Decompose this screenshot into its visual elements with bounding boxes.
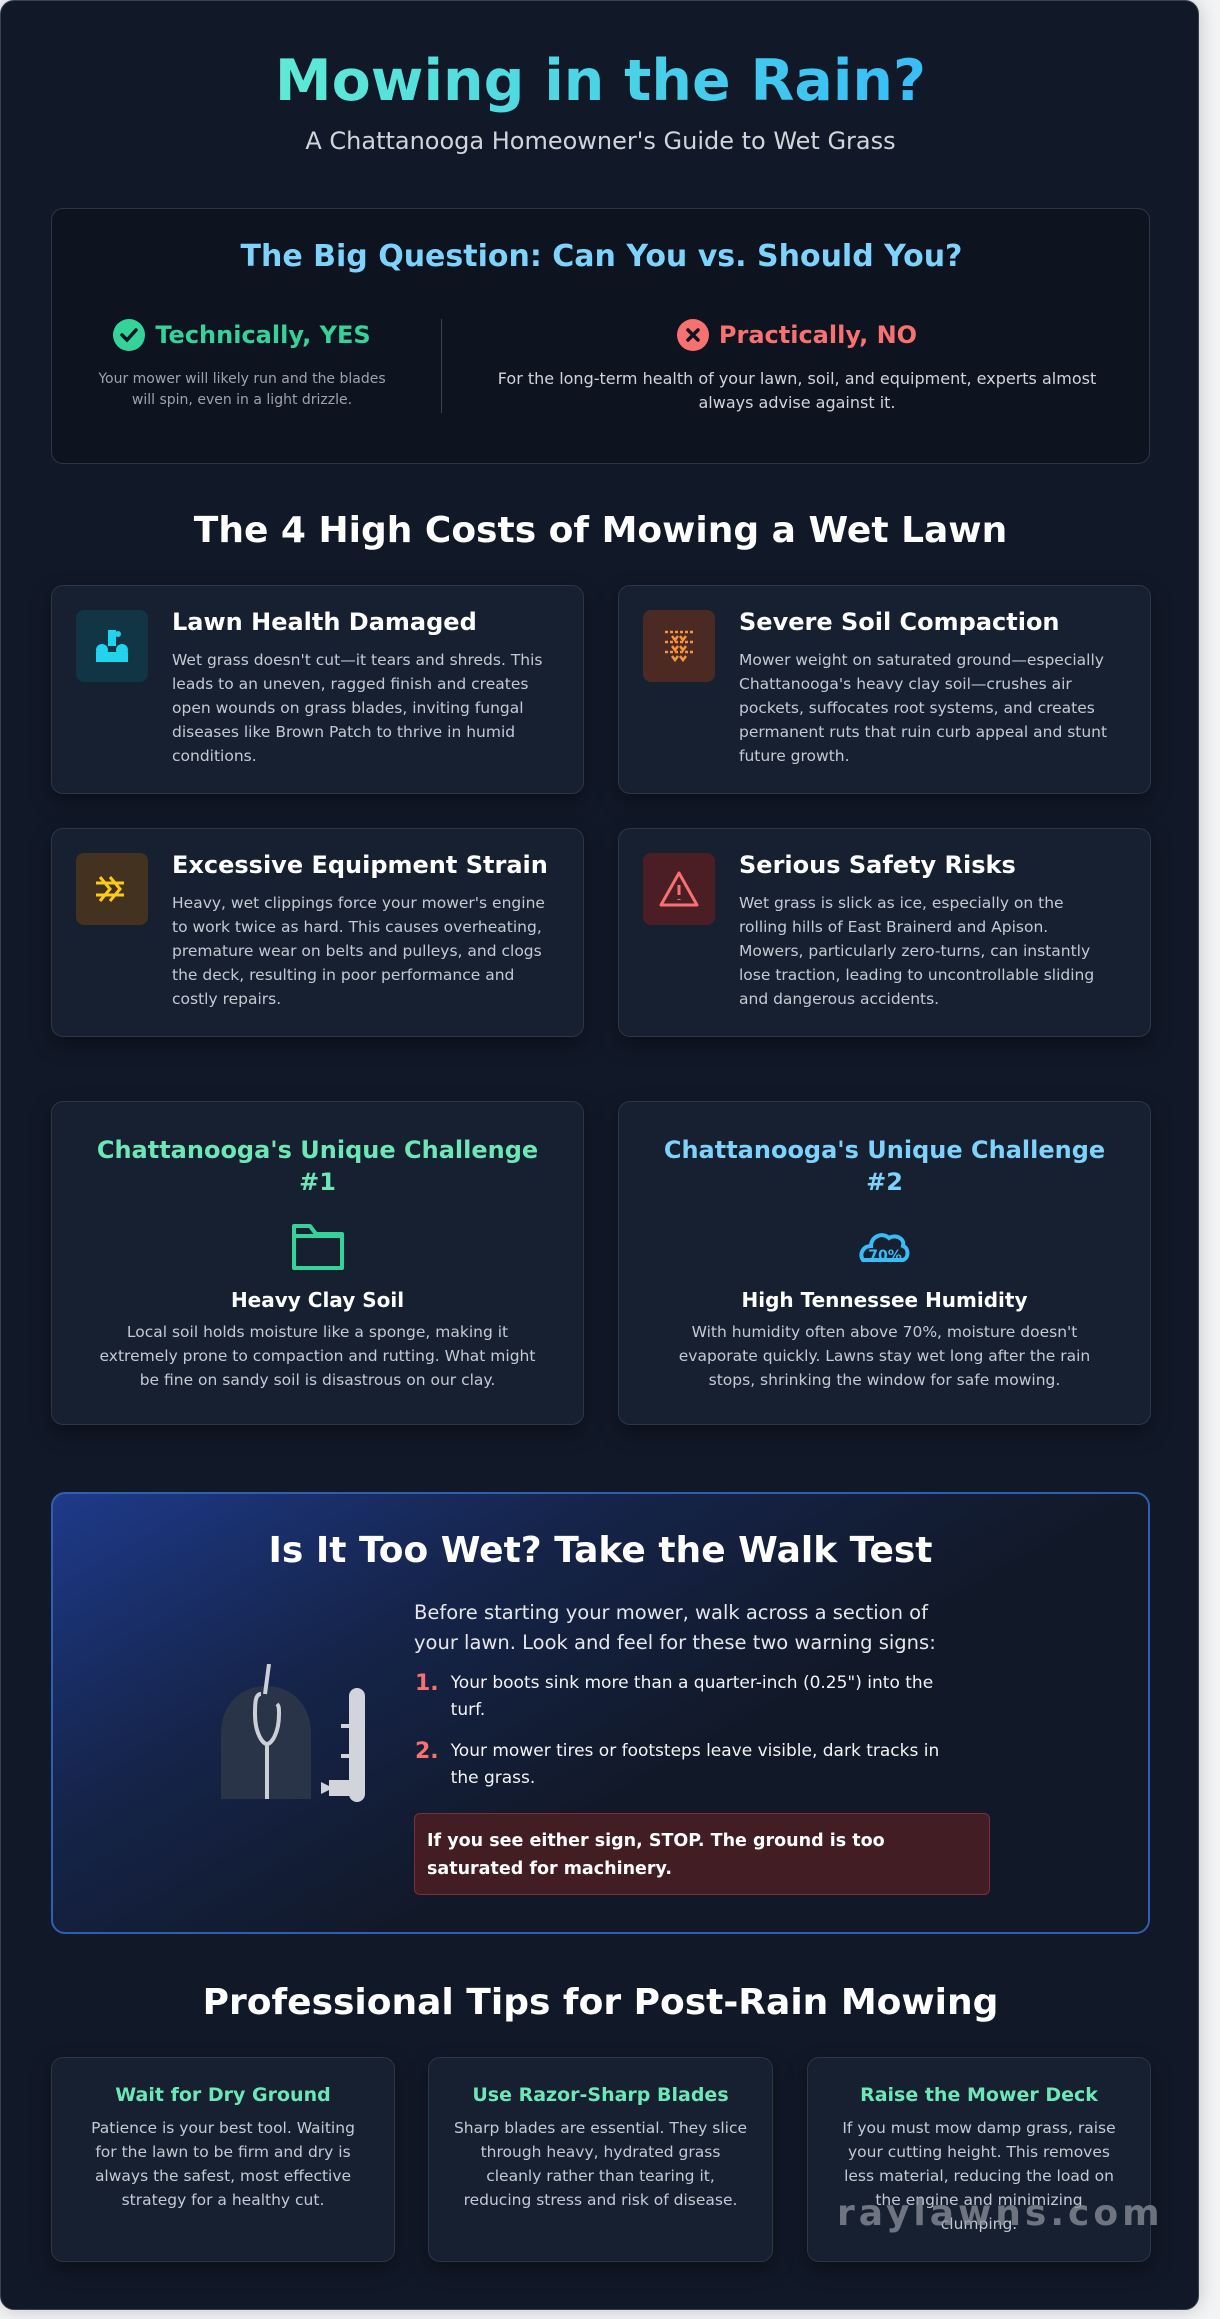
- panel: big question: [51, 208, 1150, 464]
- card: challenge 2: High Tennessee Humidity: [741, 1288, 1028, 1312]
- icon: soil: [643, 610, 715, 682]
- icon: chevrons: [76, 853, 148, 925]
- tip: dry ground: Patience is your best tool. Waiting for the lawn to be firm and dry is always the safest, most effective strategy for a healthy cut.: [91, 2119, 355, 2209]
- list: warning signs: Your boots sink more than a quarter-inch (0.25") into the turf.: [451, 1673, 933, 1720]
- column: technically yes: Technically, YES: [155, 321, 371, 349]
- column: practically no: Practically, NO: [719, 321, 917, 349]
- card: equipment strain: [51, 828, 584, 1037]
- icon: grass: [76, 610, 148, 682]
- card: challenge 2: [618, 1101, 1151, 1425]
- title: Mowing in the Rain?: [275, 48, 926, 114]
- tip: sharp blades: [428, 2057, 773, 2262]
- card: lawn health: [51, 585, 584, 794]
- icon: cloud humidity: 70%: [868, 1248, 901, 1264]
- list: warning signs: 1.: [415, 1671, 439, 1696]
- column: practically no: [498, 319, 1096, 412]
- icon: warning: [643, 853, 715, 925]
- icon: cloud humidity: [859, 1233, 910, 1264]
- card: safety: Wet grass is slick as ice, especially on the rolling hills of East Brainerd and Apison. Mowers, particularly zero-turns, can instantly lose traction, leading to uncontrollable sliding and dangerous accidents.: [739, 894, 1094, 1008]
- tip: raise deck: If you must mow damp grass, raise your cutting height. This removes less material, reducing the load on the engine and minimizing clumping.: [842, 2119, 1116, 2233]
- card: lawn health: Wet grass doesn't cut—it tears and shreds. This leads to an uneven, ragged finish and creates open wounds on grass blades, inviting fungal diseases like Brown Patch to thrive in humid conditions.: [172, 651, 542, 765]
- card: challenge 1: [51, 1101, 584, 1425]
- card: safety: [618, 828, 1151, 1037]
- list: warning signs: Your mower tires or footsteps leave visible, dark tracks in the grass.: [451, 1741, 939, 1788]
- panel: walk test: [51, 1492, 1150, 1934]
- column: practically no: For the long-term health of your lawn, soil, and equipment, experts almost: [498, 369, 1096, 388]
- tip: sharp blades: Use Razor-Sharp Blades: [472, 2084, 729, 2106]
- icon: folder: [292, 1224, 344, 1270]
- list: warning signs: 2.: [415, 1739, 439, 1764]
- card: soil compaction: [618, 585, 1151, 794]
- card: equipment strain: Excessive Equipment Strain: [172, 851, 548, 879]
- card: soil compaction: Mower weight on saturated ground—especially Chattanooga's heavy clay soil—crushes air pockets, suffocates root systems, and creates permanent ruts that ruin curb appeal and stunt future growth.: [739, 651, 1107, 765]
- card: challenge 1: #1: [299, 1168, 336, 1196]
- card: lawn health: Lawn Health Damaged: [172, 608, 477, 636]
- card: challenge 2: With humidity often above 70%, moisture doesn't evaporate quickly. Lawns stay wet long after the rain stops, shrinking the window for safe mowing.: [679, 1323, 1090, 1389]
- callout: stop: [414, 1813, 990, 1895]
- heading: big question: The Big Question: Can You vs. Should You?: [241, 239, 962, 274]
- tip: dry ground: Wait for Dry Ground: [115, 2084, 331, 2106]
- card: equipment strain: Heavy, wet clippings force your mower's engine to work twice as hard. This causes overheating, premature wear on belts and pulleys, and clogs the deck, resulting in poor performance and costly repairs.: [172, 894, 545, 1008]
- card: challenge 1: Heavy Clay Soil: [231, 1288, 404, 1312]
- callout: stop: If you see either sign, STOP. The ground is too saturated for machinery.: [427, 1831, 885, 1879]
- card: challenge 1: Local soil holds moisture like a sponge, making it extremely prone to compaction and rutting. What might be fine on sandy soil is disastrous on our clay.: [100, 1323, 535, 1389]
- card: challenge 2: #2: [866, 1168, 903, 1196]
- card: challenge 1: Chattanooga's Unique Challenge: [97, 1136, 538, 1164]
- tip: sharp blades: Sharp blades are essential. They slice through heavy, hydrated grass cleanly rather than tearing it, reducing stress and risk of disease.: [454, 2119, 747, 2209]
- card: soil compaction: Severe Soil Compaction: [739, 608, 1060, 636]
- column: technically yes: [98, 319, 386, 408]
- list: warning signs: [415, 1671, 939, 1788]
- card: challenge 2: Chattanooga's Unique Challenge: [664, 1136, 1105, 1164]
- watermark: raylawns.com: [837, 2193, 1164, 2234]
- text: intro: Before starting your mower, walk across a section of your lawn. Look and feel for these two warning signs:: [414, 1601, 936, 1654]
- column: technically yes: will spin, even in a light drizzle.: [132, 392, 352, 408]
- heading: 4 high costs: The 4 High Costs of Mowing a Wet Lawn: [194, 510, 1007, 551]
- column: practically no: always advise against it.: [698, 393, 896, 412]
- tip: raise deck: Raise the Mower Deck: [860, 2084, 1098, 2106]
- tip: dry ground: [51, 2057, 395, 2262]
- tip: raise deck: [807, 2057, 1151, 2262]
- card: safety: Serious Safety Risks: [739, 851, 1016, 879]
- illustration: boot and fork: [221, 1664, 365, 1802]
- column: technically yes: Your mower will likely run and the blades: [98, 371, 386, 387]
- heading: walk test: Is It Too Wet? Take the Walk Test: [268, 1530, 932, 1571]
- heading: professional tips: Professional Tips for Post-Rain Mowing: [203, 1982, 998, 2023]
- subtitle: A Chattanooga Homeowner's Guide to Wet Grass: [305, 127, 896, 155]
